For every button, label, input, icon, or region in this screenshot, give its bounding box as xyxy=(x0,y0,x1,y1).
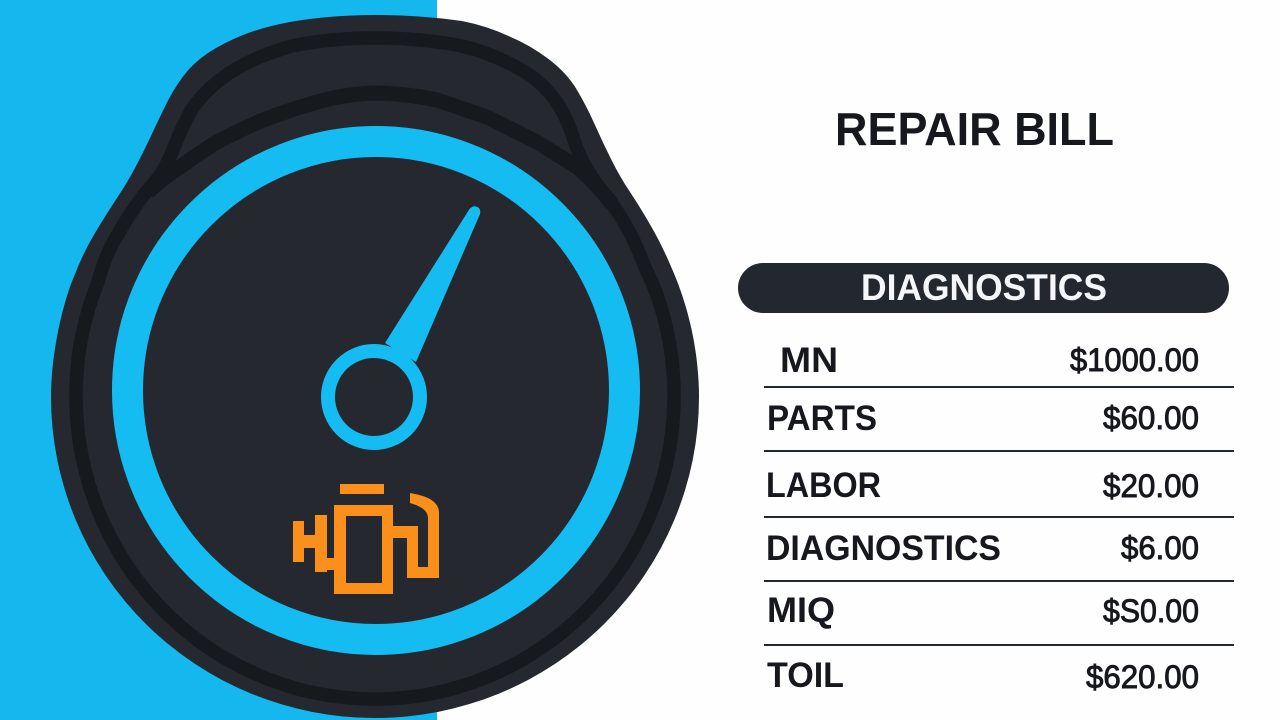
blue background panel xyxy=(0,0,437,720)
row: labor: $20.00 xyxy=(1103,468,1199,504)
row: misc xyxy=(764,591,1234,646)
row: misc: $S0.00 xyxy=(1103,593,1199,629)
needle xyxy=(385,206,480,362)
panel: repair bill table xyxy=(738,263,1234,695)
row: diagnostics xyxy=(764,529,1234,582)
row: total xyxy=(767,656,1199,695)
row: total: TOIL xyxy=(767,656,844,695)
gauge outer housing xyxy=(51,15,699,718)
table header pill: DIAGNOSTICS xyxy=(861,267,1107,308)
table header pill xyxy=(738,263,1229,313)
icon: check engine xyxy=(293,484,439,594)
row: MN: $1000.00 xyxy=(1070,342,1199,378)
title: REPAIR BILL xyxy=(835,103,1114,155)
row: MN: MN xyxy=(780,341,838,380)
row: parts: PARTS xyxy=(767,399,877,438)
gauge illustration xyxy=(51,15,699,718)
row: labor xyxy=(764,466,1234,518)
row: parts xyxy=(764,399,1234,452)
row: diagnostics: $6.00 xyxy=(1121,530,1199,566)
row: MN xyxy=(764,341,1234,388)
housing inner arc xyxy=(148,93,612,204)
row: misc: MIQ xyxy=(767,591,835,630)
row: labor: LABOR xyxy=(766,466,881,505)
row: parts: $60.00 xyxy=(1103,400,1199,436)
dial ring xyxy=(128,142,624,640)
needle hub xyxy=(328,351,420,443)
housing inner dark outline xyxy=(76,38,674,699)
row: diagnostics: DIAGNOSTICS xyxy=(766,529,1001,568)
row: total: $620.00 xyxy=(1086,659,1199,695)
